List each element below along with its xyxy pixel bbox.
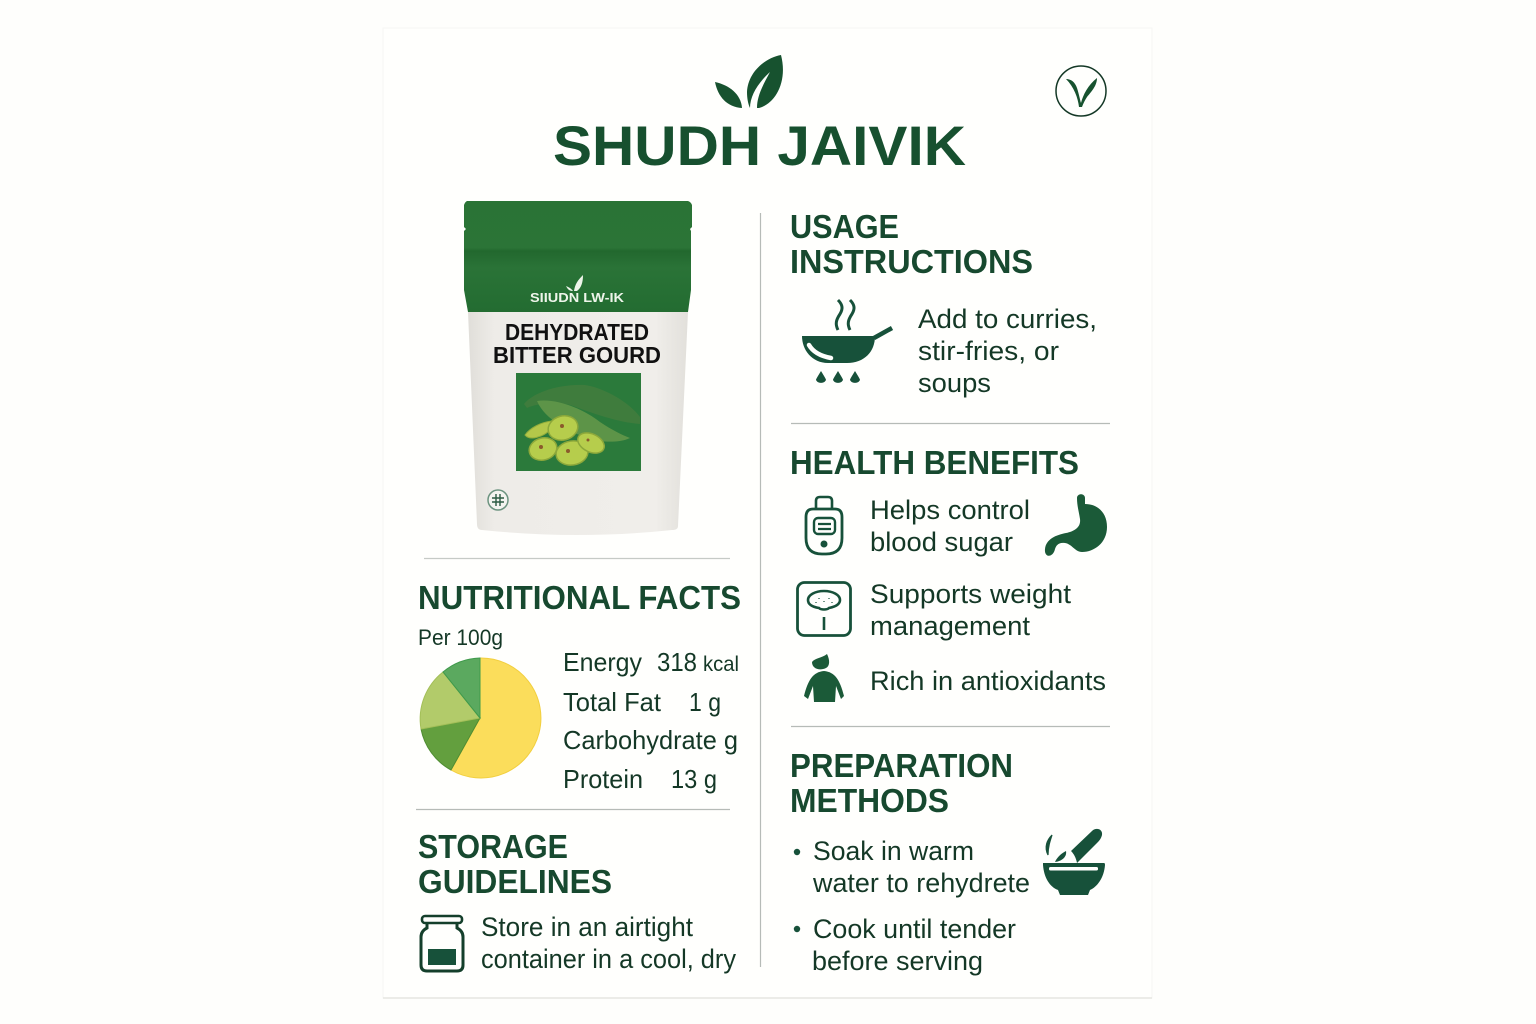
heading: preparation methods: METHODS — [790, 782, 949, 819]
pouch product name: BITTER GOURD — [493, 342, 661, 368]
row: energy: kcal — [703, 653, 739, 676]
usage text: Add to curries, — [918, 304, 1097, 334]
benefit: blood sugar: Helps control — [870, 495, 1030, 525]
pouch brand: SIIUDN LW-IK — [530, 291, 624, 305]
row: total fat — [563, 687, 721, 717]
pouch green top — [464, 201, 692, 312]
row: energy — [563, 647, 739, 677]
preparation step: cook: Cook until tender — [813, 914, 1016, 944]
pie chart — [420, 658, 541, 778]
preparation step: cook — [794, 914, 1016, 976]
preparation step: soak: Soak in warm — [813, 836, 974, 866]
pouch product photo — [516, 373, 641, 471]
pouch white body — [468, 312, 688, 535]
icon: stomach — [1045, 494, 1107, 556]
icon: mortar and pestle — [1043, 829, 1105, 895]
usage text: stir-fries, or — [918, 336, 1059, 366]
brand leaf logo — [715, 55, 783, 108]
heading: preparation methods — [790, 747, 1013, 819]
benefit: weight management — [870, 579, 1072, 641]
row: energy: 318 — [657, 647, 697, 677]
row: protein: 13 g — [671, 764, 717, 794]
usage text — [918, 304, 1097, 398]
nutrition basis label: Per 100g — [418, 625, 503, 650]
benefit: blood sugar — [870, 495, 1030, 557]
storage text: Store in an airtight — [481, 912, 693, 942]
row: total fat: 1 g — [689, 687, 721, 717]
icon: weighing scale — [798, 582, 850, 636]
row: protein — [563, 764, 717, 794]
column divider — [760, 213, 762, 967]
icon: glucose meter — [806, 497, 842, 554]
icon: wok on flame — [802, 300, 892, 383]
pouch product name — [493, 319, 661, 368]
title: SHUDH JAIVIK — [553, 114, 966, 177]
preparation step: cook: before serving — [812, 946, 983, 976]
heading: usage instructions — [790, 208, 1033, 280]
benefit: blood sugar: blood sugar — [870, 527, 1013, 557]
usage text: soups — [918, 368, 991, 398]
heading: usage instructions: INSTRUCTIONS — [790, 243, 1033, 280]
pouch product name: DEHYDRATED — [505, 319, 649, 345]
benefit: antioxidants: Rich in antioxidants — [870, 666, 1106, 696]
row: protein: Protein — [563, 764, 643, 794]
storage text: container in a cool, dry — [481, 944, 736, 974]
icon: vegetarian badge — [1056, 66, 1106, 116]
icon: storage jar — [421, 916, 463, 971]
heading: preparation methods: PREPARATION — [790, 747, 1013, 784]
heading: storage guidelines: GUIDELINES — [418, 863, 612, 900]
icon: person — [804, 654, 844, 702]
heading: storage guidelines — [418, 828, 612, 900]
product pouch — [464, 201, 692, 535]
storage text — [481, 912, 736, 974]
heading: health benefits: HEALTH BENEFITS — [790, 444, 1079, 481]
benefit: weight management: management — [870, 611, 1030, 641]
heading: usage instructions: USAGE — [790, 208, 899, 245]
poster card — [383, 28, 1152, 998]
nutrition table — [563, 647, 739, 794]
preparation step: soak — [794, 836, 1030, 898]
pouch brand — [530, 275, 624, 305]
benefit: weight management: Supports weight — [870, 579, 1072, 609]
row: energy: Energy — [563, 647, 642, 677]
row: total fat: Total Fat — [563, 687, 662, 717]
row: carbohydrate: Carbohydrate g — [563, 725, 738, 755]
preparation step: soak: water to rehydrete — [812, 868, 1030, 898]
heading: storage guidelines: STORAGE — [418, 828, 568, 865]
heading: nutritional facts: NUTRITIONAL FACTS — [418, 579, 741, 616]
pouch certification seal — [488, 490, 508, 510]
